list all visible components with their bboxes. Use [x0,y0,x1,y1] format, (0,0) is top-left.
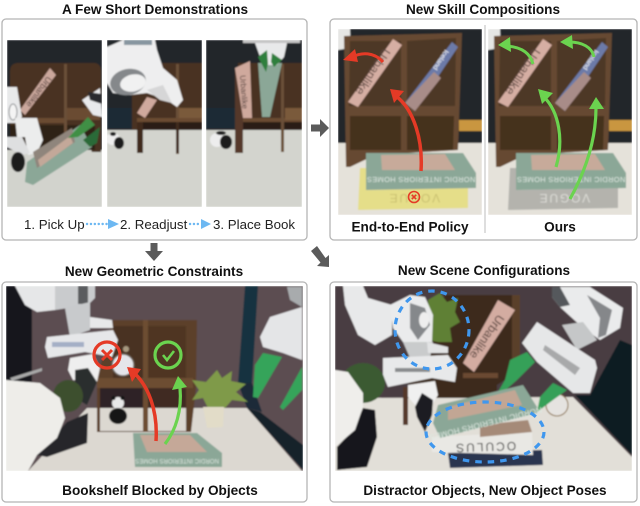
panel: new scene configurations [330,263,637,502]
arrow: to scene configurations [311,246,329,267]
panel frame: geometric constraints [2,282,307,502]
caption: bookshelf blocked: Bookshelf Blocked by Objects [62,483,258,498]
photo: distractors and new poses [335,286,632,471]
caption: ours: Ours [544,220,576,234]
divider between policies [484,25,486,233]
arrow: dotted step two to three [190,219,211,229]
photo: end-to-end policy: NORDIC INTERIORS HOMES [367,175,475,184]
icon: red cross mark [408,192,420,202]
panel frame: skill compositions [330,19,637,240]
photo: blocked bookshelf: NORDIC INTERIORS HOMES [135,457,219,463]
heading: geometric constraints: New Geometric Constraints [65,264,243,279]
photo: ours: VOGUE [538,191,590,205]
photo: distractors and new poses: Urbanlike [466,312,507,362]
photo: place book: Urbanlike [238,75,249,110]
photo: place book [206,40,302,207]
arrow: dotted step one to two [87,219,119,229]
heading: skill compositions: New Skill Compositions [406,2,560,17]
photo: end-to-end policy: VOGUE [388,191,440,205]
panel: new geometric constraints [2,264,307,502]
photo: pick up: Urbanlike [24,75,54,110]
arrow: red top trajectory [343,49,383,62]
arrow: red blocked trajectory [127,367,156,441]
icon: red cross in circle [94,342,120,368]
photo: ours: Iceland [581,48,599,71]
photo: blocked bookshelf [6,286,303,471]
icon: green check in circle [155,342,181,368]
caption: distractors and poses: Distractor Objects, New Object Poses [363,483,607,498]
panel: new skill compositions [330,2,637,240]
photo: end-to-end policy [338,29,482,215]
arrow: green top trajectory two [560,35,594,57]
step caption: place book: 3. Place Book [213,217,295,232]
photo: pick up [7,40,102,207]
photo: ours [488,29,632,215]
dashed highlight: distractor arm [395,291,469,369]
arrow: to skill compositions [311,119,329,137]
arrow: to geometric constraints [145,243,163,261]
arrow: green free trajectory [165,376,187,444]
arrow: green trajectory two [570,97,604,199]
photo: end-to-end policy: Iceland [431,48,449,71]
photo: distractors and new poses: OCULUS [454,439,516,455]
caption: end-to-end policy: End-to-End Policy [351,220,469,234]
heading: scene configurations: New Scene Configurations [398,263,570,278]
heading: demonstrations: A Few Short Demonstrations [62,2,248,17]
photo: readjust [106,40,202,207]
dashed highlight: object pose [426,402,544,462]
photo: ours: NORDIC INTERIORS HOMES [517,175,625,184]
panel frame: demonstrations [2,19,307,240]
panel: a few short demonstrations [2,2,307,240]
arrow: red main trajectory [390,89,421,171]
photo: end-to-end policy: Urbanlike [352,46,393,98]
panel frame: scene configurations [330,282,637,502]
step caption: readjust: 2. Readjust [120,217,188,232]
arrow: green trajectory one [538,89,560,167]
step caption: pick up: 1. Pick Up [24,217,85,232]
arrow: green top trajectory one [498,37,533,64]
photo: ours: Urbanlike [502,46,543,98]
photo: distractors and new poses: NORDIC INTERIORS HOMES [428,405,543,442]
